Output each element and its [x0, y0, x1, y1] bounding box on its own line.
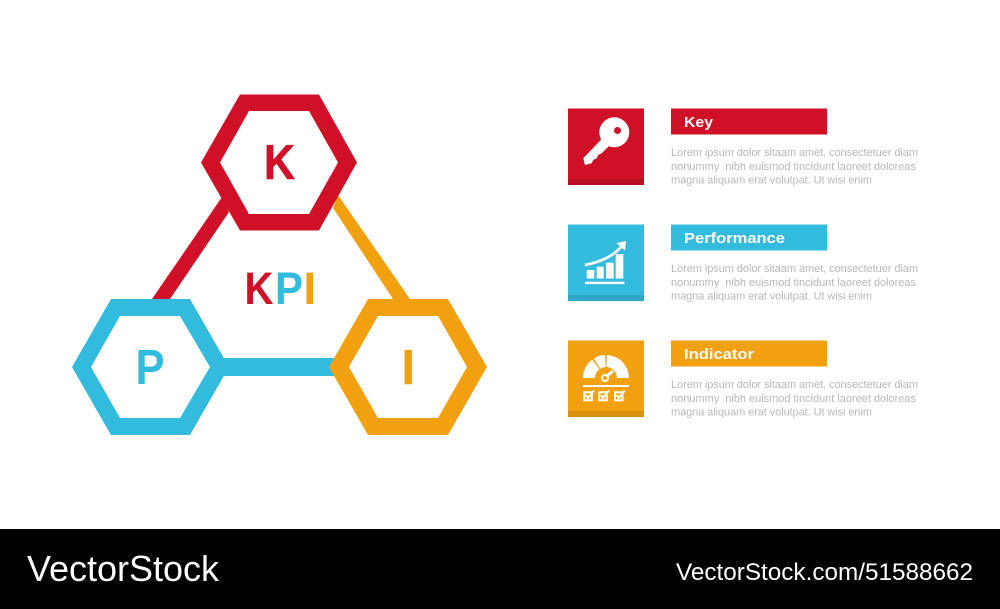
footer url: VectorStock.com/51588662 — [676, 559, 973, 586]
center label: KPI: P — [275, 263, 303, 314]
icon: gauge with checkboxes — [568, 340, 644, 417]
center label: KPI: K — [244, 263, 274, 314]
description: Performance: magna aliquam erat volutpat. Ut wisi enim — [671, 290, 872, 302]
connector: orange K to I — [333, 195, 410, 299]
header bar: Indicator — [671, 340, 827, 366]
description: Indicator: nonummy nibh euismod tincidunt laoreet doloreas — [671, 393, 916, 405]
row: Key — [568, 108, 918, 186]
center label: KPI — [244, 263, 316, 314]
hexagon: K — [201, 94, 357, 230]
connector: blue P to I — [220, 358, 338, 376]
description: Key: Lorem ipsum dolor sitaam amet, consectetuer diam — [671, 147, 918, 159]
header bar: Key: Key — [684, 114, 714, 131]
connector: red K to P — [152, 197, 229, 299]
header bar: Indicator: Indicator — [684, 346, 754, 363]
icon: growth chart — [568, 224, 644, 301]
footer logo text: VectorStock — [27, 548, 220, 589]
hexagon: I — [329, 299, 487, 435]
description: Key: magna aliquam erat volutpat. Ut wisi enim — [671, 174, 872, 186]
description: Performance — [671, 263, 918, 302]
hexagon: K: K — [264, 136, 295, 190]
header bar: Performance: Performance — [684, 230, 785, 247]
row: Indicator — [568, 340, 918, 418]
row: Performance — [568, 224, 918, 302]
description: Performance: nonummy nibh euismod tincidunt laoreet doloreas — [671, 277, 916, 289]
hexagon: I: I — [402, 341, 415, 395]
hexagon: P: P — [136, 341, 164, 395]
description: Indicator: magna aliquam erat volutpat. Ut wisi enim — [671, 406, 872, 418]
description: Key: nonummy nibh euismod tincidunt laoreet doloreas — [671, 161, 916, 173]
hexagon triangle diagram — [72, 94, 487, 435]
header bar: Performance — [671, 224, 827, 250]
header bar: Key — [671, 108, 827, 134]
description: Indicator — [671, 379, 918, 418]
description: Indicator: Lorem ipsum dolor sitaam amet, consectetuer diam — [671, 379, 918, 391]
hexagon: P — [72, 299, 229, 435]
footer bar — [0, 529, 1000, 609]
description: Performance: Lorem ipsum dolor sitaam amet, consectetuer diam — [671, 263, 918, 275]
center label: KPI: I — [304, 263, 316, 314]
icon: key — [568, 108, 644, 185]
description: Key — [671, 147, 918, 186]
